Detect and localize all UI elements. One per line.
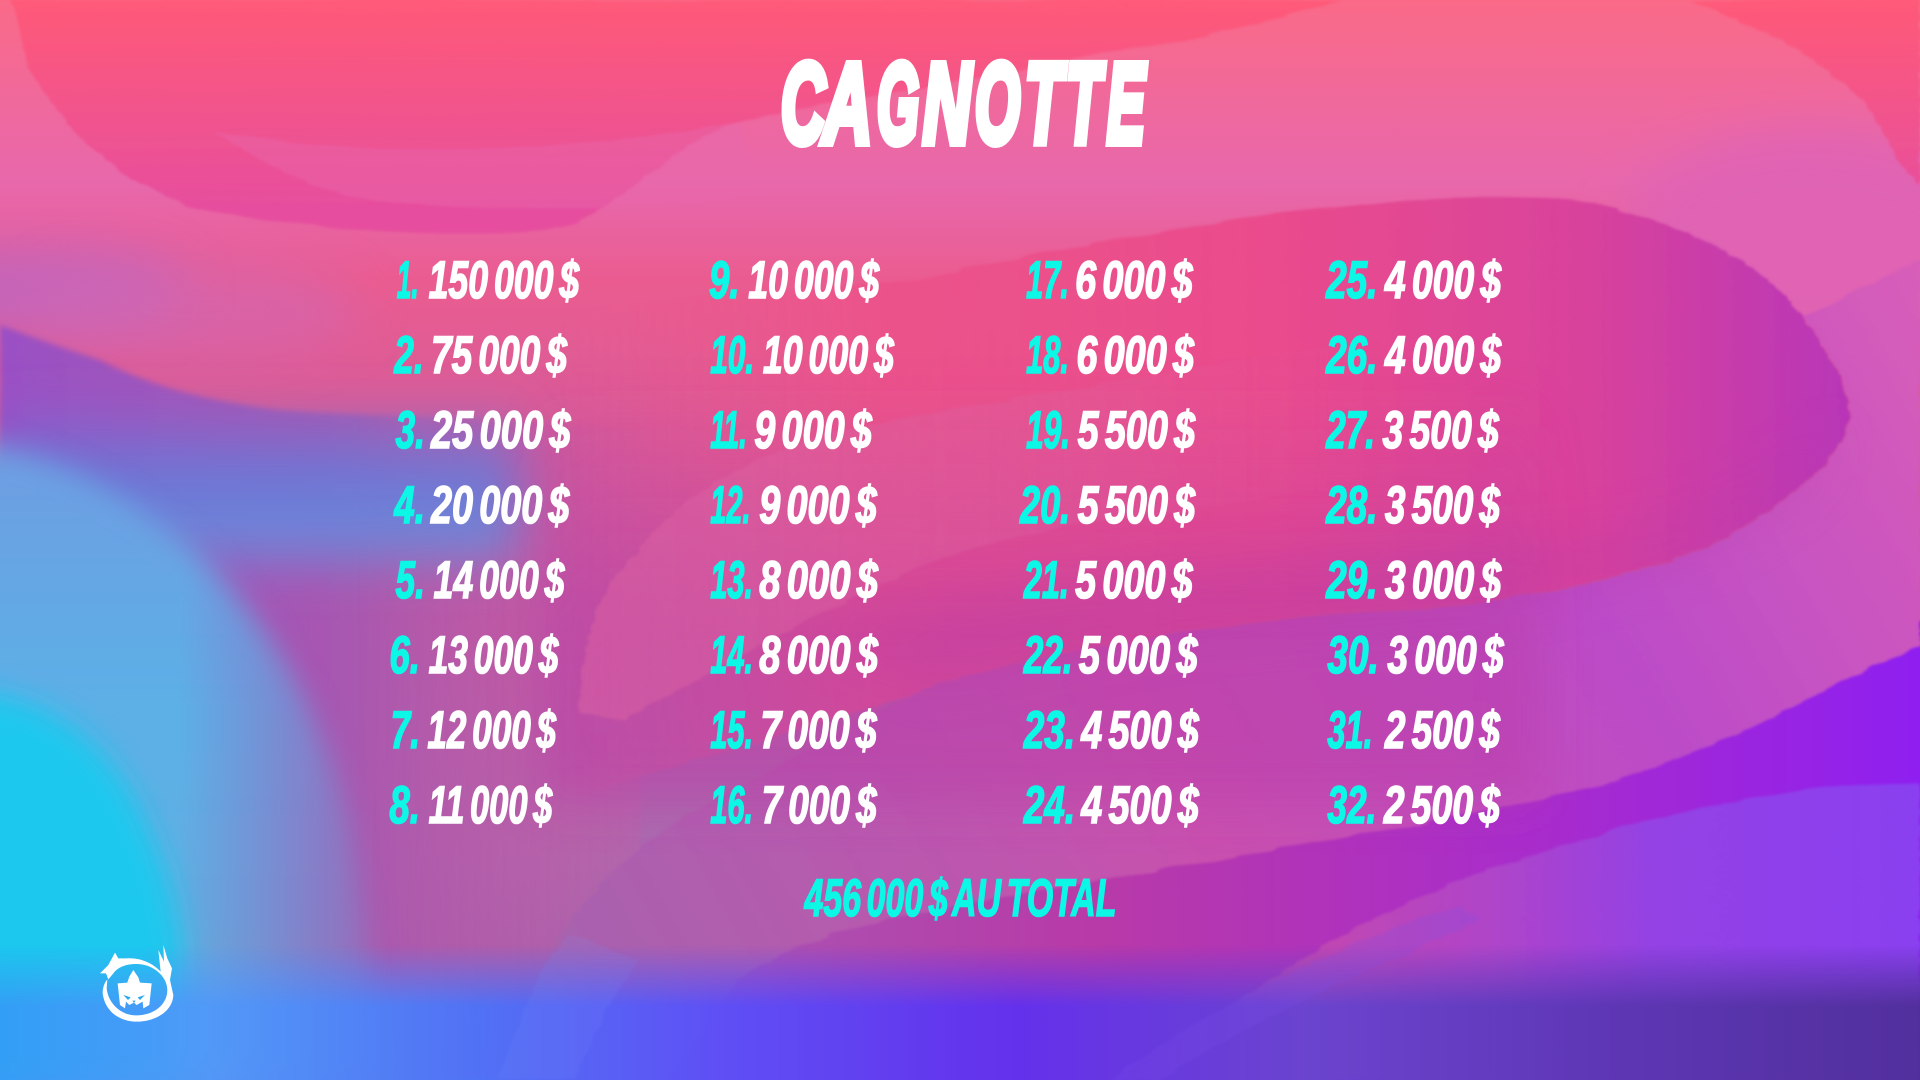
prize column 1: 3. [396,401,425,460]
total prize pool: 456 000 $ AU TOTAL [804,869,1116,928]
prize column 3: 21. [1023,551,1069,610]
title: T [1025,40,1066,166]
prize column 4: 3 500 $ [1385,476,1500,535]
prize column 1: 25 000 $ [430,401,571,460]
prize column 4 [1325,251,1504,835]
prize column 2 [709,251,894,835]
prize column 4: 31. [1327,701,1373,760]
prize column 4: 3 000 $ [1387,626,1504,685]
prize column 1: 75 000 $ [431,326,567,385]
prize column 2: 7 000 $ [760,701,877,760]
prize column 3: 22. [1023,626,1073,685]
prize column 1: 4. [394,476,425,535]
prize column 2: 12. [710,476,751,535]
prize column 2: 10 000 $ [763,326,894,385]
title: A [821,40,872,166]
prize column 3: 5 500 $ [1078,401,1196,460]
prize column 4: 4 000 $ [1384,251,1502,310]
prize column 3 [1019,251,1199,835]
title: G [877,40,919,166]
prize column 1: 7. [391,701,420,760]
prize column 2: 9. [709,251,740,310]
prize column 2: 8 000 $ [759,626,878,685]
title: O [975,40,1020,166]
prize column 3: 20. [1019,476,1070,535]
prize column 4: 27. [1325,401,1375,460]
prize column 2: 10 000 $ [748,251,880,310]
prize column 2: 9 000 $ [759,476,877,535]
prize column 4: 26. [1325,326,1378,385]
prize column 4: 30. [1327,626,1379,685]
prize column 2: 9 000 $ [754,401,872,460]
icon: dragon logo [100,945,173,1022]
prize column 1: 11 000 $ [429,776,553,835]
title: E [1107,40,1147,166]
prize column 3: 4 500 $ [1080,776,1199,835]
prize column 3: 4 500 $ [1080,701,1199,760]
prize column 1: 2. [394,326,424,385]
prize column 1: 20 000 $ [430,476,570,535]
prize column 4: 32. [1327,776,1376,835]
title [781,40,1147,166]
prize column 3: 19. [1026,401,1070,460]
prize column 3: 5 000 $ [1075,551,1193,610]
prize column 2: 8 000 $ [759,551,878,610]
prize column 2: 7 000 $ [762,776,877,835]
title: C [781,40,826,166]
prize column 2: 15. [710,701,753,760]
prize column 1: 14 000 $ [434,551,565,610]
prize column 3: 6 000 $ [1076,326,1194,385]
prize column 4: 2 500 $ [1384,701,1500,760]
prize column 4: 2 500 $ [1383,776,1500,835]
prize column 1: 1. [397,251,419,310]
title: N [923,40,972,166]
prize column 3: 5 500 $ [1078,476,1196,535]
prize column 3: 17. [1026,251,1069,310]
prize column 4: 4 000 $ [1384,326,1502,385]
prize column 3: 6 000 $ [1075,251,1193,310]
prize column 1: 13 000 $ [429,626,559,685]
prize column 1 [389,251,580,835]
prize column 1: 8. [389,776,420,835]
prize column 1: 5. [396,551,425,610]
prize column 4: 25. [1325,251,1378,310]
prize column 4: 29. [1325,551,1378,610]
prize column 1: 12 000 $ [427,701,556,760]
prize column 1: 6. [389,626,420,685]
prize column 4: 3 500 $ [1382,401,1499,460]
prize column 2: 14. [710,626,753,685]
prize column 3: 18. [1026,326,1069,385]
prize column 4: 3 000 $ [1385,551,1502,610]
prize column 3: 23. [1023,701,1075,760]
prize column 3: 5 000 $ [1079,626,1198,685]
prize column 2: 11. [710,401,747,460]
prize column 2: 10. [710,326,754,385]
prize column 2: 16. [710,776,753,835]
title: T [1066,40,1105,166]
prize column 3: 24. [1023,776,1075,835]
prize column 4: 28. [1325,476,1378,535]
prize column 2: 13. [710,551,753,610]
prize column 1: 150 000 $ [429,251,580,310]
